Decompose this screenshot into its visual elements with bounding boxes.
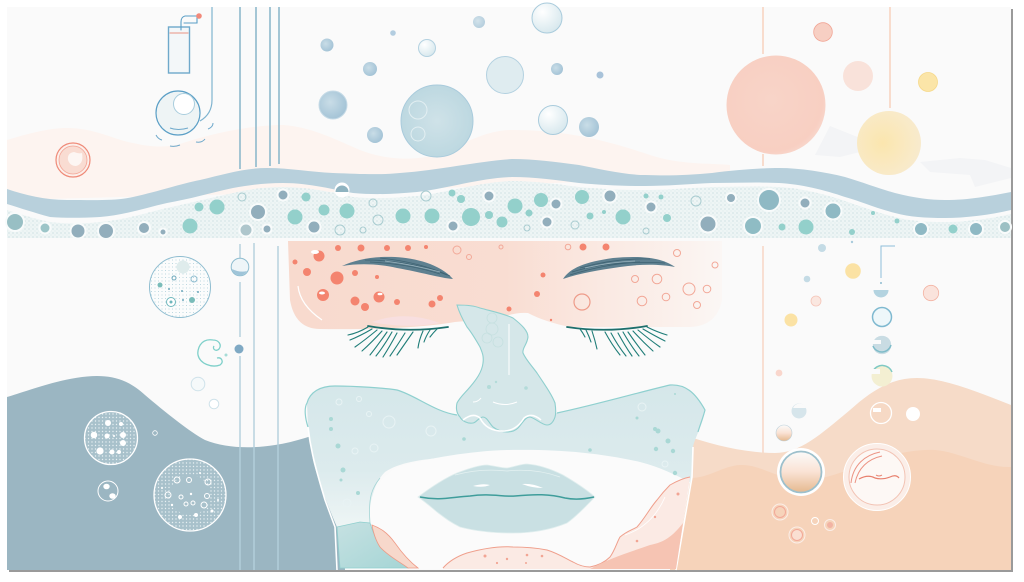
right floating droplets — [776, 241, 939, 376]
teal spiral — [198, 340, 222, 366]
inner face teal edge — [369, 478, 380, 523]
blue skin barrier band — [7, 159, 1011, 218]
left cell: floating top — [150, 256, 210, 318]
lower right peach hill — [670, 378, 1011, 570]
mask outline — [305, 385, 705, 432]
white cell in blue hill: large — [154, 459, 226, 531]
small peach rings — [772, 504, 836, 543]
tiny cell — [153, 431, 157, 435]
chin and jaw peach shape — [443, 477, 690, 569]
lower vertical lines — [240, 243, 278, 570]
bracket line — [881, 246, 895, 278]
lower face mask — [307, 385, 705, 527]
left eyebrow — [342, 257, 453, 279]
small bead on line — [234, 344, 244, 354]
jaw white outlines — [308, 427, 693, 570]
forehead peach skin — [288, 241, 722, 329]
white cell in blue hill: medium — [84, 412, 138, 464]
large orb — [777, 448, 825, 496]
forehead spots — [292, 244, 610, 321]
forehead highlight — [298, 286, 322, 320]
left neck teal shape — [337, 522, 408, 568]
stippled skin layer with cells — [6, 181, 1011, 239]
lips — [418, 464, 595, 533]
droplet stack — [776, 282, 920, 441]
nose — [456, 305, 556, 432]
spot glints — [311, 250, 382, 295]
left neck peach shape — [372, 525, 418, 568]
pale small bubbles — [191, 354, 228, 409]
hydration tube line — [200, 7, 212, 121]
lower right darker peach wave — [670, 450, 1011, 570]
right eyebrow — [563, 257, 675, 279]
left eye lashes — [348, 326, 448, 357]
peach and yellow spheres — [726, 23, 938, 175]
floating blue bubbles — [319, 3, 604, 157]
lower face ring bubbles — [336, 396, 668, 507]
lower face freckles — [329, 393, 677, 495]
cross-section cell — [844, 444, 910, 510]
lower left blue hill — [7, 376, 345, 570]
red cell — [56, 143, 90, 177]
upper vertical lines: blue — [240, 7, 279, 169]
right eye lashes — [567, 326, 667, 356]
left eyelid pink highlight — [372, 316, 440, 326]
glass of water icon — [168, 13, 202, 73]
water droplet sphere — [156, 91, 213, 146]
small white cell — [98, 481, 118, 501]
vertical lines: peach — [763, 7, 890, 570]
clock bubble on line — [231, 258, 249, 276]
pale peach background wave — [7, 125, 730, 200]
forehead ring spots — [453, 244, 718, 310]
white lower face — [370, 450, 690, 569]
misty clouds — [815, 126, 1011, 187]
